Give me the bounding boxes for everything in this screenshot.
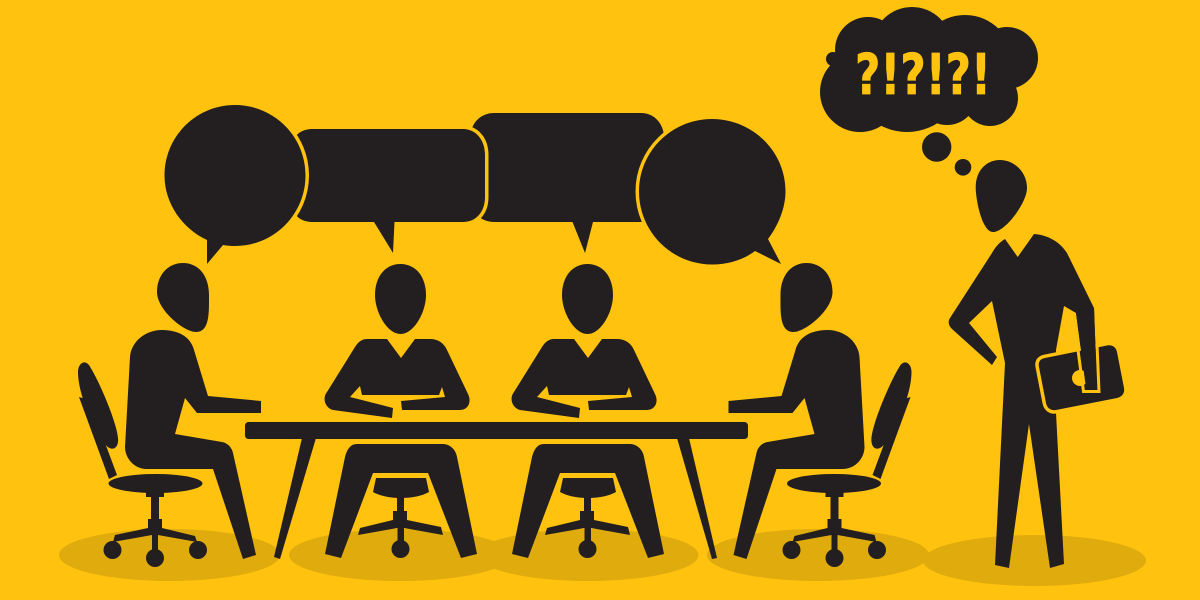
person front 1 with stool: [325, 264, 477, 558]
body: [728, 330, 864, 559]
legs: [512, 444, 664, 558]
speech bubble 2: rounded rectangle: [290, 129, 485, 253]
thought text: ?!?!?!: [855, 43, 991, 108]
thought cloud: [820, 7, 1038, 132]
head: [157, 263, 209, 332]
meeting table: [245, 422, 748, 559]
speech bubble 3: rounded rectangle: [471, 113, 664, 253]
speech bubble 4: round: [639, 119, 786, 264]
standing person with folder: [949, 160, 1124, 568]
office chair: [78, 362, 207, 567]
head: [375, 264, 426, 334]
thought dot large: [922, 132, 951, 162]
head: [976, 160, 1027, 232]
legs: [325, 444, 477, 558]
person right with chair: [728, 263, 912, 567]
body and legs: [949, 234, 1097, 568]
head: [562, 264, 613, 334]
stool: [545, 478, 630, 558]
torso and arms: [325, 339, 470, 418]
thought dot small: [955, 159, 971, 176]
floor shadows: [59, 529, 1146, 586]
stool: [358, 478, 443, 558]
person front 2 with stool: [512, 264, 664, 558]
torso and arms: [512, 339, 657, 418]
head: [780, 263, 832, 332]
body: [125, 330, 261, 559]
person left with chair: [78, 263, 261, 567]
folder: [1039, 300, 1124, 410]
office chair: [782, 362, 912, 567]
speech bubbles: [164, 105, 786, 264]
speech bubble 1: round: [164, 105, 306, 264]
